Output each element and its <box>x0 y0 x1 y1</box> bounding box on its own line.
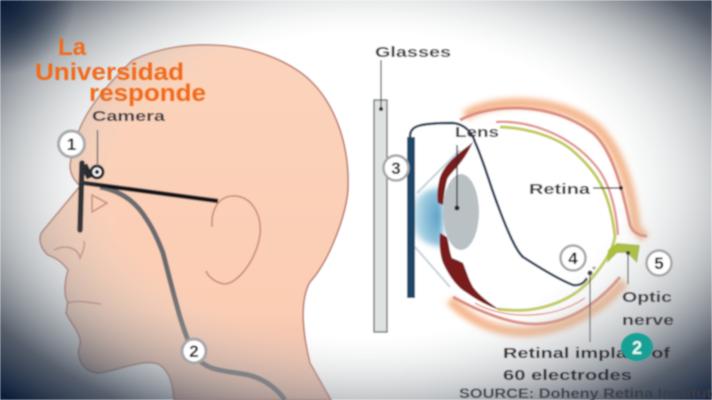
choroid line <box>496 122 618 235</box>
crystalline lens <box>443 174 479 250</box>
label: 1: 1 <box>67 135 76 154</box>
channel logo: 2 <box>632 338 642 358</box>
label: 2: 2 <box>189 342 199 361</box>
implant pointer <box>589 274 591 342</box>
watermark: La Universidad responde: responde <box>89 80 206 107</box>
label: 5: 5 <box>654 254 664 273</box>
channel logo <box>621 333 653 361</box>
label: Retinal implant of 60 electrodes: Retinal implant of <box>503 345 671 362</box>
label: 3: 3 <box>391 159 401 178</box>
retinal implant <box>588 270 592 276</box>
label: 1 <box>58 131 84 157</box>
glasses frame <box>80 163 218 230</box>
lens pointer <box>456 145 458 208</box>
label: Glasses: Glasses <box>375 44 451 61</box>
eye <box>92 195 107 212</box>
label: Optic nerve <box>622 289 674 329</box>
eyeball <box>410 103 647 332</box>
label: Retina: Retina <box>529 181 591 198</box>
retina pointer <box>593 187 621 189</box>
camera <box>91 166 103 178</box>
label: 2 <box>182 339 206 363</box>
sclera line <box>453 108 647 324</box>
label: Lens: Lens <box>455 124 499 141</box>
label: 4 <box>560 246 586 270</box>
wire 2 <box>100 187 285 400</box>
label: Retinal implant of 60 electrodes: 60 electrodes <box>503 367 632 384</box>
retina line <box>498 127 615 310</box>
optic nerve pointer <box>627 254 629 284</box>
watermark: La Universidad responde: Universidad <box>35 59 184 86</box>
ear <box>206 196 260 284</box>
outer sclera glow <box>450 103 645 332</box>
label: Camera: Camera <box>92 108 166 125</box>
label: Optic nerve: Optic <box>622 289 672 306</box>
label: 5 <box>646 250 672 276</box>
iris and ciliary body <box>437 142 473 205</box>
head silhouette <box>40 45 348 400</box>
watermark: La Universidad responde <box>35 34 206 107</box>
watermark: La Universidad responde: La <box>58 34 87 61</box>
electrode wire <box>410 123 587 285</box>
label: 3 <box>384 156 408 180</box>
nostril and mouth lines <box>54 241 101 304</box>
corner shade <box>0 0 90 90</box>
label: Retinal implant of 60 electrodes <box>503 345 671 384</box>
glasses lens strip <box>374 100 387 332</box>
label: 4: 4 <box>568 249 578 268</box>
cornea <box>411 187 443 247</box>
optic nerve <box>607 243 640 263</box>
label: Optic nerve: nerve <box>622 312 674 329</box>
camera video bar <box>407 137 415 298</box>
